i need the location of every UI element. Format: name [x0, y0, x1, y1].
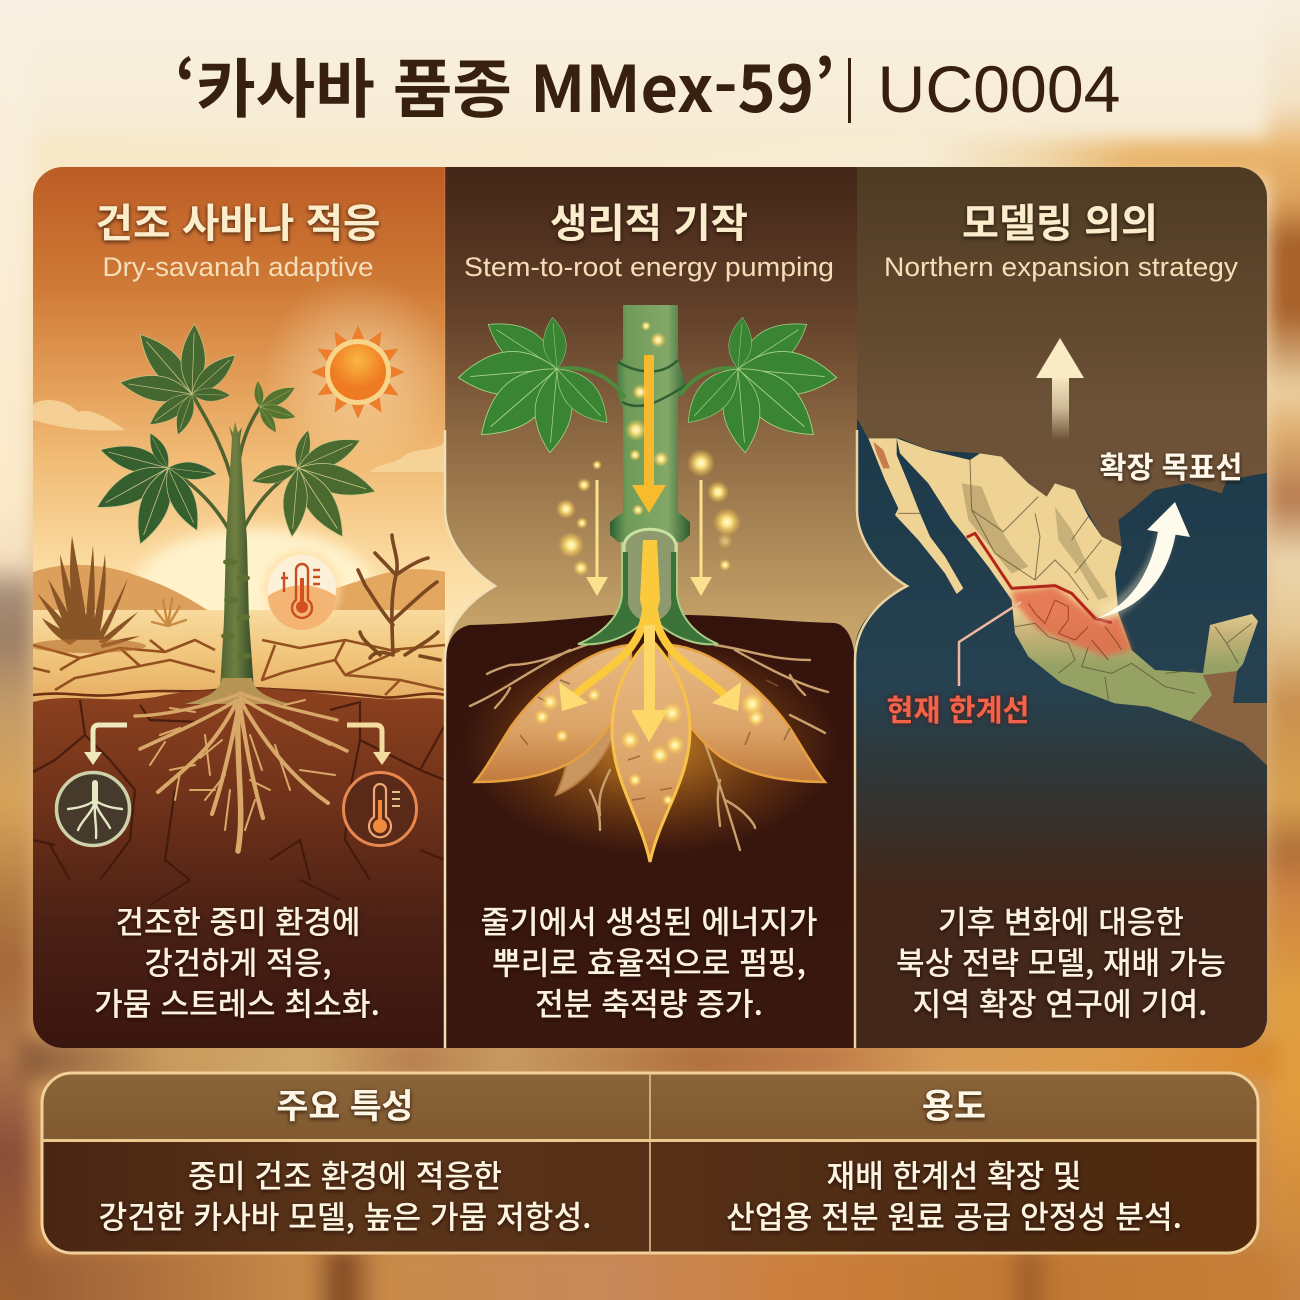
text block: 전분 축적량 증가.	[535, 979, 763, 1025]
current limit line	[967, 533, 1112, 623]
mainland	[897, 438, 1258, 721]
petioles	[168, 394, 298, 530]
Baja peninsula	[868, 438, 963, 594]
text: key traits: 중미 건조 환경에 적응한	[188, 1151, 502, 1197]
header row	[42, 1073, 1258, 1141]
sun glow	[276, 287, 440, 450]
main panels	[30, 167, 1268, 1073]
soil cracks	[33, 700, 445, 905]
clouds	[33, 400, 445, 472]
soil	[445, 615, 855, 1048]
leaf: left	[456, 309, 618, 454]
state borders	[898, 460, 1252, 700]
sea	[855, 418, 1268, 1073]
text block: 북상 전략 모델, 재배 가능	[896, 938, 1226, 984]
bush: small tuft	[152, 598, 186, 626]
label: expansion target: 확장 목표선	[1100, 443, 1242, 487]
stem	[220, 422, 254, 690]
tuber skin marks	[520, 680, 790, 800]
panel: modeling significance	[855, 167, 1268, 1073]
subheading: Northern expansion strategy	[884, 252, 1239, 282]
subheading: Dry-savanah adaptive	[102, 252, 374, 282]
arrows: side pump	[586, 480, 712, 596]
petioles	[557, 368, 738, 398]
tuber: left	[475, 645, 631, 782]
current limit zone	[1012, 587, 1132, 657]
arrow: to root icon	[93, 725, 127, 755]
text block	[896, 897, 1226, 1025]
title: UC0004	[878, 52, 1120, 126]
soil	[33, 689, 445, 1048]
text block: 뿌리로 효율적으로 펌핑,	[492, 938, 806, 984]
text block: 지역 확장 연구에 기여.	[912, 979, 1208, 1025]
arrow: root energy split	[559, 540, 741, 742]
arrow: to heat icon	[347, 725, 382, 755]
Guatemala land	[1190, 664, 1268, 767]
text block	[95, 906, 379, 1021]
text: use: 재배 한계선 확장 및	[826, 1151, 1082, 1197]
roots	[135, 678, 347, 851]
leaf: left	[96, 433, 217, 545]
stem upper	[610, 305, 690, 542]
cracked ground	[33, 610, 445, 710]
icon: thermometer circle	[344, 772, 416, 846]
label: current limit: 현재 한계선	[886, 686, 1030, 730]
tuber: back left	[554, 727, 612, 797]
panel: physiological mechanism	[445, 167, 907, 1048]
hills	[33, 564, 208, 610]
header: use: 용도	[922, 1079, 986, 1128]
title: ‘카사바 품종 MMex-59’	[175, 39, 835, 131]
leaf: right	[252, 430, 376, 538]
tuber: right	[669, 645, 825, 782]
icon: root circle	[56, 772, 130, 846]
text block: 줄기에서 생성된 에너지가	[480, 897, 818, 943]
text: key traits: 강건한 카사바 모델, 높은 가뭄 저항성.	[98, 1192, 592, 1238]
body row	[42, 1141, 1258, 1253]
heading: 모델링 의의	[962, 191, 1158, 249]
text: use	[726, 1151, 1182, 1238]
sun icon	[311, 325, 405, 419]
stem lower	[578, 530, 718, 644]
header: key traits: 주요 특성	[276, 1079, 414, 1128]
sparkles	[534, 321, 765, 806]
highland shading	[962, 483, 1028, 573]
map of Mexico	[855, 307, 1268, 1073]
panel: dry savanna adaptation	[30, 167, 503, 1048]
heading: 생리적 기작	[550, 191, 748, 249]
root hairs	[470, 640, 828, 850]
horizon glow	[133, 520, 378, 610]
arrow: stem energy	[632, 355, 666, 513]
plant	[90, 324, 380, 690]
text: key traits	[98, 1151, 592, 1238]
arrow: northward	[1036, 338, 1084, 440]
text block: 건조한 중미 환경에	[116, 897, 360, 943]
title	[175, 39, 1120, 131]
text: use: 산업용 전분 원료 공급 안정성 분석.	[726, 1192, 1182, 1238]
underground glow	[474, 643, 826, 847]
icon: heat thermometer	[262, 549, 342, 630]
leader line	[959, 602, 1021, 686]
text block: 강건하게 적응,	[144, 938, 332, 984]
arrow: expansion	[1095, 502, 1190, 619]
heading: 건조 사바나 적응	[96, 191, 380, 249]
text block	[480, 897, 818, 1025]
subheading: Stem-to-root energy pumping	[464, 252, 834, 282]
text block: 기후 변화에 대응한	[938, 897, 1184, 943]
bush: left dry shrub	[37, 536, 140, 648]
bush: right dry shrub	[358, 535, 440, 660]
north land	[857, 307, 1268, 547]
leaf: top	[118, 324, 242, 437]
summary table	[42, 1073, 1258, 1253]
leaf: small	[254, 381, 296, 432]
text block: 가뭄 스트레스 최소화.	[94, 979, 380, 1025]
tuber: center	[612, 638, 690, 862]
leaf: right	[677, 309, 839, 454]
